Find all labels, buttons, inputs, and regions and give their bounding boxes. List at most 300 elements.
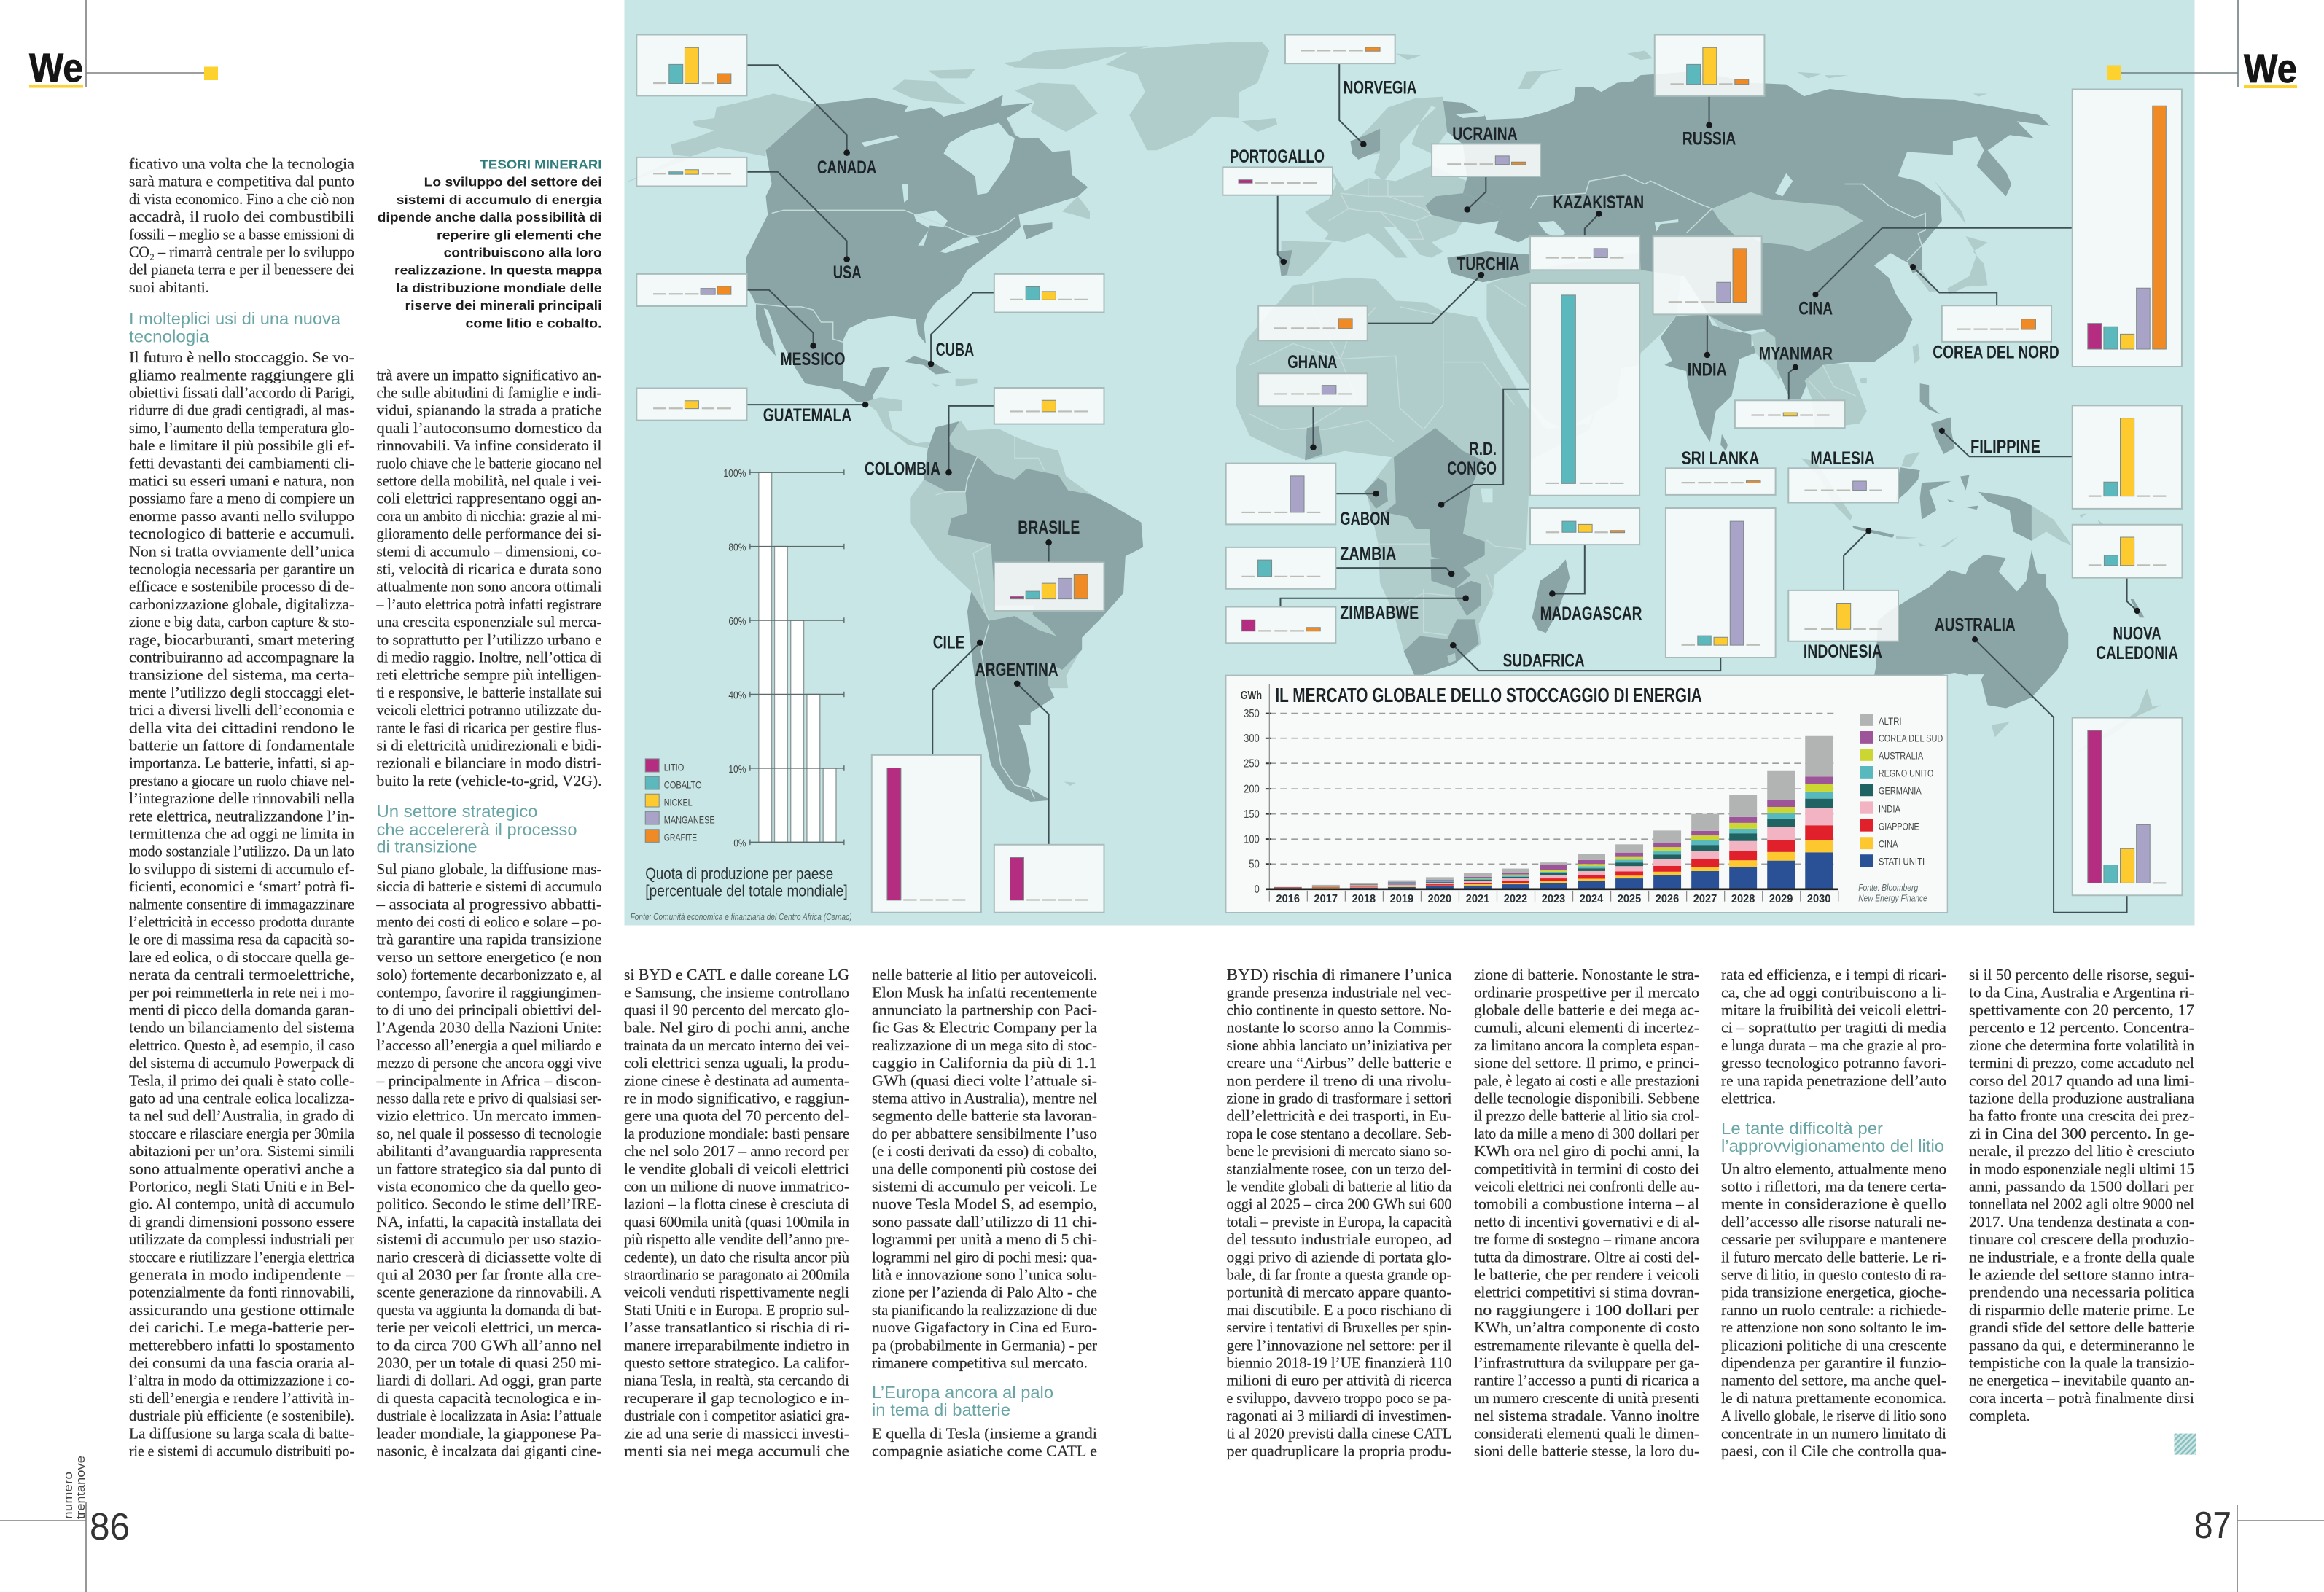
country: Turchia (1258, 254, 1519, 340)
unit label: GWh (1241, 690, 1262, 702)
text column 8: spettivamente con 20 percento, 17 (1969, 1002, 2194, 1019)
text column 3: l’asse transatlantico si rischia di ri- (624, 1319, 849, 1336)
chart y axis labels: 150 (1244, 808, 1260, 821)
text column 5: nostante lo scorso anno la Commis- (1226, 1019, 1452, 1037)
country: Colombia (865, 388, 1104, 480)
text column 7: ranno un ruolo centrale: a richiede- (1721, 1301, 1946, 1319)
text column 6: ordinarie prospettive per il mercato (1474, 983, 1699, 1001)
country: Kazakistan (1530, 192, 1644, 270)
text column 8: passano da qui, e determineranno le (1969, 1336, 2194, 1354)
text column 1: Non si tratta ovviamente dell’unica (129, 542, 355, 560)
footer left: issue and page number: 86 (90, 1506, 130, 1548)
country: R.D. Congo (1438, 283, 1639, 508)
text column 2: rezionali e bilanciare in modo distri- (376, 754, 602, 772)
chart legend: INDIA (1879, 803, 1901, 815)
text column 5: gere l’innovazione nel settore: per il (1226, 1336, 1452, 1354)
text column 8: termini di prezzo, come accaduto nel (1969, 1054, 2194, 1072)
text column 1: ta nel sud dell’Australia, in grado di (129, 1107, 354, 1125)
bar 2018 (1350, 883, 1378, 889)
text column 4: Elon Musk ha infatti recentemente (872, 983, 1097, 1001)
text column 1: gato ad una centrale eolica localizza- (129, 1089, 354, 1107)
text column 3: niana Tesla, in realtà, sta cercando di (624, 1372, 849, 1389)
text column 6: nel sistema stradale. Vanno inoltre (1474, 1407, 1699, 1424)
text column 6: competitività in termini di costo dei (1474, 1160, 1699, 1177)
stacked bar chart (1266, 684, 1838, 902)
text column 1: del sistema di accumulo Powerpack di (129, 1054, 354, 1072)
share chart title: [percentuale del totale mondiale] (645, 882, 848, 900)
mineral legend: GRAFITE (664, 832, 697, 843)
text column 5: creare una “Airbus” delle batterie e (1226, 1054, 1452, 1072)
chart year labels: 2023 (1542, 893, 1565, 905)
chart legend: COREA DEL SUD (1879, 733, 1943, 744)
footer right: page number (2194, 1505, 2324, 1592)
country: Kazakistan: KAZAKISTAN (1553, 192, 1644, 213)
text column 5: totali – previste in Europa, la capacità (1226, 1213, 1452, 1230)
country: Gabon: GABON (1340, 509, 1390, 529)
text column 4: pa (probabilmente in Germania) - per (872, 1336, 1097, 1354)
text column 2: sti, velocità di ricarica e durata sono (376, 560, 602, 577)
text column 1: tendo un bilanciamento del sistema (129, 1019, 355, 1037)
chart year labels: 2026 (1656, 893, 1679, 905)
bar 2022 (1502, 869, 1529, 889)
country: Myanmar: MYANMAR (1759, 343, 1833, 364)
text column 2: vidui, spianando la strada a pratiche (376, 402, 602, 419)
chart legend: AUSTRALIA (1879, 750, 1924, 762)
text column 5: ragonati ai 3 miliardi di investimen- (1226, 1407, 1452, 1424)
country: R.D. Congo: R.D. (1469, 439, 1497, 459)
world map (625, 42, 2161, 802)
chart year labels: 2021 (1466, 893, 1489, 905)
text column 6: pale, è legato ai costi e alle prestazioni (1474, 1072, 1699, 1089)
map: North America (625, 42, 1239, 448)
country: Nuova Caledonia: NUOVA (2113, 624, 2161, 644)
country: Indonesia: INDONESIA (1804, 641, 1882, 662)
text column 4: (e i costi derivati da esso) di cobalto, (872, 1142, 1097, 1160)
heading: L'Europa ancora al palo (872, 1383, 1053, 1419)
text column 5: e sviluppo, davvero troppo poco se pa- (1226, 1389, 1452, 1407)
text column 3: Stati Uniti e in Europa. E proprio sul- (624, 1301, 849, 1319)
text column 1: tecnologia necessaria per garantire un (129, 560, 354, 577)
country: Argentina: ARGENTINA (975, 660, 1058, 680)
text column 2: to da circa 700 GWh all’anno nel (376, 1336, 602, 1354)
text column 5: oggi al 2025 – circa 200 GWh sui 600 (1226, 1195, 1452, 1213)
country: Sudafrica (1450, 508, 1776, 671)
text column 1: metterebbero infatti lo spostamento (129, 1336, 354, 1354)
country: Corea del Nord: COREA DEL NORD (1933, 343, 2059, 363)
text column 1: della vita dei cittadini rendono le (129, 719, 354, 736)
heading: Un settore strategico (376, 802, 577, 857)
text column 7: dipendenza per garantire il funzio- (1721, 1354, 1946, 1372)
footer left: issue and page number: trentanove (74, 1456, 87, 1519)
text column 1: le ore di massima resa da capacità so- (129, 931, 354, 948)
share axis labels: 40% (728, 689, 746, 701)
country: Ghana: GHANA (1287, 352, 1337, 372)
text column 1: efficace e sostenibile processo di de- (129, 578, 354, 596)
text column 6 (1474, 966, 1700, 1459)
share axis labels: 60% (728, 615, 746, 628)
text column 2: rinnovabili. Va infine considerato il (376, 437, 602, 454)
text column 6: tutta da dimostrare. Oltre ai costi del- (1474, 1248, 1699, 1265)
text column 2: contempo, favorire il raggiungimen- (376, 983, 602, 1001)
country: Malesia (1788, 448, 1898, 502)
text column 8: le aziende del settore stanno intra- (1969, 1265, 2194, 1283)
text column 8: completa. (1969, 1407, 2030, 1424)
country: Zambia: ZAMBIA (1340, 544, 1396, 564)
text column 7: sotto i riflettori, ma da tenere certa- (1721, 1178, 1946, 1195)
text column 6: za limitano ancora la completa espan- (1474, 1037, 1699, 1054)
chart legend (1860, 714, 1943, 867)
text column 2: stemi di accumulo – dimensioni, co- (376, 542, 602, 560)
text column 2: reti elettriche sempre più intelligen- (376, 666, 602, 684)
text column 4: rimanere competitiva sul mercato. (872, 1354, 1088, 1372)
text column 3: veicoli venduti rispettivamente negli (624, 1284, 849, 1301)
country: Ucraina (1432, 124, 1540, 213)
text column 6: le batterie, che per rendere i veicoli (1474, 1265, 1699, 1283)
text column 4: compagnie asiatiche come CATL e (872, 1442, 1097, 1459)
text column 2: coli elettrici rappresentano oggi an- (376, 490, 602, 507)
chart year labels: 2025 (1618, 893, 1641, 905)
chart year labels: 2018 (1352, 893, 1376, 905)
text column 4: sta pianificando la realizzazione di due (872, 1301, 1097, 1319)
text column 4: sono passate dall’utilizzo di 11 chi- (872, 1213, 1097, 1230)
text column 2: solo) fortemente decarbonizzato e, al (376, 966, 602, 983)
share axis labels: 10% (728, 763, 746, 776)
text column 1: carbonizzazione globale, digitalizza- (129, 596, 354, 613)
text column 1: dei carichi. Le mega-batterie per- (129, 1319, 354, 1336)
text column 2: nesso dalla rete e privo di qualsiasi ser- (376, 1089, 602, 1107)
intro box: Tesori minerari: realizzazione. In questa mappa (394, 263, 602, 278)
country: Messico: MESSICO (781, 349, 846, 370)
bar 2019 (1388, 881, 1416, 889)
chart year labels: 2022 (1504, 893, 1527, 905)
footer right: page number: 87 (2194, 1505, 2231, 1547)
country: Corea del Nord (1910, 264, 2059, 363)
mineral legend: COBALTO (664, 779, 702, 791)
text column 2: to soprattutto per l’utilizzo urbano e (376, 631, 602, 648)
heading: Un settore strategico: di transizione (376, 838, 477, 857)
country: India: INDIA (1688, 360, 1727, 381)
text column 1: ficativo una volta che la tecnologia (129, 155, 355, 172)
text column 6: delle tecnologie disponibili. Sebbene (1474, 1089, 1699, 1107)
country: Brasile: BRASILE (1018, 518, 1080, 538)
text column 2: NA, infatti, la capacità installata dei (376, 1213, 602, 1230)
chart source (1858, 882, 1927, 904)
text column 2: dustriale è localizzata in Asia: l’attuale (376, 1407, 602, 1424)
text column 8: grandi sfide del settore delle batterie (1969, 1319, 2194, 1336)
text column 1: suoi abitanti. (129, 278, 209, 296)
text column 2: nario crescerà di diciassette volte di (376, 1248, 602, 1265)
text column 8: zi in Cina del 300 percento. In ge- (1969, 1125, 2194, 1142)
text column 4: realizzazione di un mega sito di stoc- (872, 1037, 1097, 1054)
chart year labels: 2030 (1807, 893, 1830, 905)
text column 8: si il 50 percento delle risorse, segui- (1969, 966, 2194, 983)
country: Cuba: CUBA (936, 340, 974, 360)
text column 4: una delle componenti più costose dei (872, 1160, 1097, 1177)
logo right with crop lines (2107, 0, 2297, 91)
text column 2: sistemi di accumulo per uso stazio- (376, 1230, 602, 1248)
intro box: Tesori minerari (378, 157, 602, 330)
heading: I molteplici usi: tecnologia (129, 327, 210, 346)
text column 3: trainata da un mercato interno dei vei- (624, 1037, 849, 1054)
text column 3: recuperare il gap tecnologico e in- (624, 1389, 849, 1407)
text column 2: so, nel quale il possesso di tecnologie (376, 1125, 602, 1142)
text column 7: le di natura prettamente economica. (1721, 1389, 1946, 1407)
bar 2021 (1464, 873, 1492, 889)
text column 1: di grandi dimensioni possono essere (129, 1213, 354, 1230)
text column 5: servire i tentativi di Bruxelles per spin- (1226, 1319, 1452, 1336)
text column 5: stanzialmente rosee, con un terzo del- (1226, 1160, 1452, 1177)
text column 1: contribuiranno ad accompagnare la (129, 649, 355, 666)
text column 1: ridurre di due gradi centigradi, al mas- (129, 402, 354, 419)
text column 2 (375, 366, 602, 1459)
text column 7: gresso tecnologico potranno favori- (1721, 1054, 1946, 1072)
country: Brasile (994, 518, 1104, 611)
country: Indonesia (1788, 528, 1898, 662)
heading: L'Europa ancora al palo: in tema di batterie (872, 1400, 1010, 1419)
text column 5: per quadruplicare la propria produ- (1226, 1442, 1451, 1459)
text column 2: l’accesso all’energia a quel miliardo e (376, 1037, 602, 1054)
country: Portogallo: PORTOGALLO (1230, 147, 1325, 167)
country: Filippine: FILIPPINE (1970, 437, 2040, 457)
text column 8: tinuare col crescere della produzio- (1969, 1230, 2194, 1248)
text column 2: cora un ambito di nicchia: grazie al mi- (376, 507, 602, 525)
country: Russia: RUSSIA (1682, 129, 1736, 149)
text column 4: zione per l’azienda di Palo Alto - che (872, 1284, 1097, 1301)
text column 2: – principalmente in Africa – discon- (375, 1072, 602, 1089)
map: South America (910, 421, 1143, 802)
text column 3: straordinario se paragonato ai 200mila (624, 1265, 850, 1283)
text column 3: e Samsung, che insieme controllano (624, 983, 849, 1001)
share axis and white bars (645, 469, 844, 845)
text column 3 (624, 966, 850, 1459)
text column 5: del tessuto industriale europeo, ad (1226, 1230, 1452, 1248)
text column 2: l’Agenda 2030 della Nazioni Unite: (376, 1019, 602, 1037)
bar 2017 (1312, 885, 1340, 889)
country: Sri Lanka: SRI LANKA (1682, 448, 1759, 469)
text column 7: dell’accesso alle risorse naturali ne- (1721, 1213, 1946, 1230)
text column 2: trà avere un impatto significativo an- (376, 366, 602, 383)
text column 1: menti di picco della domanda garan- (129, 1002, 354, 1019)
bar 2024 (1578, 854, 1605, 889)
text column 5: dell’elettricità e dei trasporti, in Eu- (1226, 1107, 1452, 1125)
text column 2: ti e responsive, le batterie installate sui (376, 684, 602, 701)
text column 2: leader mondiale, la giapponese Pa- (376, 1424, 602, 1442)
text column 8: anni, passando da 1500 dollari per (1969, 1178, 2194, 1195)
text column 8: cora incerta – potrà finalmente dirsi (1969, 1389, 2194, 1407)
intro box: Tesori minerari: TESORI MINERARI (480, 157, 602, 172)
text column 4: nuove Gigafactory in Cina ed Euro- (872, 1319, 1097, 1336)
text column 1: abitazioni per un’ora. Sistemi simili (129, 1142, 354, 1160)
text column 8: di risparmio delle materie prime. Le (1969, 1301, 2194, 1319)
country: Norvegia (1285, 35, 1417, 147)
text column 3: le vendite globali di veicoli elettrici (624, 1160, 849, 1177)
country: Malesia: MALESIA (1810, 448, 1875, 469)
text column 1: matici su esseri umani e natura, non (129, 472, 355, 490)
chart y axis labels: 200 (1244, 784, 1260, 796)
text column 3: bale. Nel giro di pochi anni, anche (624, 1019, 849, 1037)
text column 7: mente in considerazione è quello (1721, 1195, 1946, 1213)
chart panel: production share by country (631, 467, 852, 922)
text column 8: ha fatto fronte una crescita dei prez- (1969, 1107, 2194, 1125)
text column 4: caggio in California da più di 1.1 (872, 1054, 1097, 1072)
map: Oceania (1801, 452, 2161, 754)
country: Australia: AUSTRALIA (1935, 614, 2016, 635)
text column 7: il futuro mercato delle batterie. Le ri- (1721, 1248, 1946, 1265)
text column 8: to da Cina, Australia e Argentina ri- (1969, 983, 2194, 1001)
text column 1: del pianeta terra e per il benessere dei (129, 261, 354, 278)
chart y axis labels (1244, 708, 1260, 896)
text column 5: non perdere il treno di una rivolu- (1226, 1072, 1452, 1089)
text column 4: GWh (quasi dieci volte l’attuale si- (872, 1072, 1097, 1089)
text column 1: rete elettrica, neutralizzandone l’in- (129, 807, 354, 824)
text column 1: simo, l’aumento della temperatura glo- (129, 419, 354, 437)
text column 1: lo sviluppo di sistemi di accumulo ef- (129, 860, 354, 878)
text column 4: logrammi per unità a meno di 5 chi- (872, 1230, 1097, 1248)
chart year labels: 2027 (1693, 893, 1717, 905)
text column 1: batterie un fattore di fondamentale (129, 736, 354, 754)
text column 7 (1721, 966, 1947, 1459)
share chart title (645, 865, 848, 900)
country: Filippine (1939, 405, 2182, 509)
intro box: Tesori minerari: riserve dei minerali principali (405, 298, 602, 313)
text column 1: sti dell’energia e rendere l’attività in- (129, 1389, 354, 1407)
chart year labels: 2019 (1390, 893, 1413, 905)
heading: Le tante difficoltà: l’approvvigionamento del litio (1721, 1136, 1944, 1155)
text column 2: liardi di dollari. Ad oggi, gran parte (376, 1372, 602, 1389)
text column 1: rage, biocarburanti, smart metering (129, 631, 355, 648)
text column 6: lato da mille a meno di 300 dollari per (1474, 1125, 1699, 1142)
text column 1: dei consumi da una fascia oraria al- (129, 1354, 354, 1372)
text column 6: KWh, un’altra componente di costo (1474, 1319, 1699, 1336)
text column 1: lare ed eolica, o di stoccare quella ge- (129, 948, 354, 966)
text column 4: E quella di Tesla (insieme a grandi (872, 1424, 1097, 1442)
country: Cina: CINA (1798, 298, 1833, 319)
text column 7: ca, che ad oggi contribuiscono a li- (1721, 983, 1946, 1001)
bar 2025 (1615, 844, 1643, 889)
text column 8: 2017. Una tendenza destinata a con- (1969, 1213, 2194, 1230)
text column 8: tempistiche con la quale la transizio- (1969, 1354, 2194, 1372)
text column 6: estremamente rilevante è quella del- (1474, 1336, 1699, 1354)
text column 3: zie ad una serie di massicci investi- (624, 1424, 849, 1442)
country: Zambia (1226, 544, 1454, 589)
text column 3: cedente), un dato che risulta ancor più (624, 1248, 849, 1265)
heading: Un settore strategico: che accelererà il processo (376, 820, 577, 839)
text column 7: ci – soprattutto per tragitti di media (1721, 1019, 1947, 1037)
text column 6: veicoli elettrici nei confronti delle au- (1474, 1178, 1699, 1195)
text column 5: oggi privo di aziende di portata glo- (1226, 1248, 1452, 1265)
text column 1: tecnologico di batterie e accumuli. (129, 525, 354, 542)
share axis labels (723, 467, 746, 849)
text column 6: tre forme di sostegno – rimane ancora (1474, 1230, 1700, 1248)
text column 2: mento dei costi di eolico e solare – po- (376, 913, 602, 930)
country: Colombia: COLOMBIA (865, 459, 940, 480)
country: Zimbabwe: ZIMBABWE (1340, 603, 1419, 623)
text column 2: nasonic, è incalzata dai giganti cine- (376, 1442, 602, 1459)
text column 6: sione del settore. Il primo, e princi- (1474, 1054, 1699, 1072)
country: Sudafrica: SUDAFRICA (1503, 651, 1585, 671)
text column 3: con un milione di nuove immatrico- (624, 1178, 849, 1195)
chart year labels (1276, 893, 1830, 905)
text column 8: ne energetica – inevitabile quanto an- (1969, 1372, 2194, 1389)
text column 7: A livello globale, le riserve di litio sono (1721, 1407, 1946, 1424)
chart year labels: 2017 (1314, 893, 1338, 905)
text column 5: grande presenza industriale nel vec- (1226, 983, 1452, 1001)
text column 1: Portorico, negli Stati Uniti e in Bel- (129, 1178, 354, 1195)
map: Europe and Russia (1210, 42, 1830, 451)
country: R.D. Congo: CONGO (1447, 459, 1497, 479)
country: Canada: CANADA (817, 157, 876, 178)
text column 1: assicurando una gestione ottimale (129, 1301, 354, 1319)
country: USA (636, 157, 862, 283)
country: Madagascar (1530, 508, 1642, 624)
text column 5: bene le previsioni di mercato siano so- (1226, 1142, 1452, 1160)
text column 1: rie e sistemi di accumulo distribuiti po- (129, 1442, 354, 1459)
text column 8 (1969, 966, 2195, 1424)
text column 1: l’integrazione delle rinnovabili nella (129, 789, 355, 807)
text column 1: stoccare e riutilizzare l’energia elettrica (129, 1248, 355, 1265)
share axis labels: 80% (728, 541, 746, 554)
text column 1: utilizzate da complessi industriali per (129, 1230, 354, 1248)
text column 1 (129, 155, 355, 1459)
chart y axis labels: 100 (1244, 834, 1260, 846)
intro box: Tesori minerari: Lo sviluppo del settore dei (424, 175, 602, 190)
text column 3: lazioni – la flotta cinese è cresciuta di (624, 1195, 849, 1213)
text column 2: attualmente non sono ancora ottimali (376, 578, 602, 596)
text column 5: bale, di far fronte a questa grande op- (1226, 1265, 1452, 1283)
country: Norvegia: NORVEGIA (1344, 77, 1417, 98)
text column 6: netto di incentivi governativi e di al- (1474, 1213, 1699, 1230)
text column 1: gio. Al contempo, unità di accumulo (129, 1195, 354, 1213)
bar 2026 (1653, 830, 1681, 889)
chart y axis labels: 250 (1244, 758, 1260, 770)
text column 1: trici a diversi livelli dell’economia e (129, 701, 354, 719)
text column 4: nuove Tesla Model S, ad esempio, (872, 1195, 1097, 1213)
text column 2: trà garantire una rapida transizione (376, 931, 602, 948)
country: Madagascar: MADAGASCAR (1540, 604, 1642, 624)
chart legend: STATI UNITI (1879, 856, 1925, 867)
text column 1: potenzialmente da fonti rinnovabili, (129, 1284, 354, 1301)
intro box: Tesori minerari: reperire gli elementi che (437, 227, 602, 242)
text column 4: logrammi nel giro di pochi mesi: qua- (872, 1248, 1097, 1265)
text column 2: Sul piano globale, la diffusione mas- (376, 860, 602, 878)
text column 2: quali l’autoconsumo domestico da (376, 419, 602, 437)
text column 7: pida transizione energetica, gioche- (1721, 1284, 1946, 1301)
text column 7: plicazioni politiche di una crescente (1721, 1336, 1946, 1354)
intro box: Tesori minerari: contribuiscono alla loro (444, 245, 602, 260)
text column 6: elettrici competitivi si stima dovran- (1474, 1284, 1699, 1301)
text column 1: l’elettricità in eccesso prodotta durante (129, 913, 354, 930)
text column 4: fic Gas & Electric Company per la (872, 1019, 1098, 1037)
text column 1: sono attualmente operativi anche a (129, 1160, 355, 1177)
text column 6: un numero crescente di unità presenti (1474, 1389, 1699, 1407)
text column 4: lità e innovazione sono l’unica solu- (872, 1265, 1097, 1283)
country: Argentina (975, 660, 1104, 913)
text column 2: una crescita esponenziale sul merca- (376, 613, 602, 631)
text column 5: chio continente in questo settore. No- (1226, 1002, 1452, 1019)
text column 1: stoccare e rilasciare energia per 30mila (129, 1125, 355, 1142)
text column 4: sistemi di accumulo per veicoli. Le (872, 1178, 1097, 1195)
text column 2: settore della mobilità, nel quale i vei- (376, 472, 602, 490)
text column 2: politico. Secondo le stime dell’IRE- (376, 1195, 602, 1213)
text column 3: più rispetto alle vendite dell’anno pre- (624, 1230, 849, 1248)
text column 8: tazione della produzione australiana (1969, 1089, 2195, 1107)
text column 1: bale e limitare il più possibile gli ef- (129, 437, 354, 454)
text column 2: – associata al progressivo abbatti- (375, 895, 602, 913)
text column 2: che sulle abitudini di famiglie e indi- (376, 383, 602, 401)
text column 2: to di uno dei principali obiettivi del- (376, 1002, 602, 1019)
text column 3: quasi il 90 percento del mercato glo- (624, 1002, 849, 1019)
text column 4: segmento delle batterie sta lavoran- (872, 1107, 1097, 1125)
